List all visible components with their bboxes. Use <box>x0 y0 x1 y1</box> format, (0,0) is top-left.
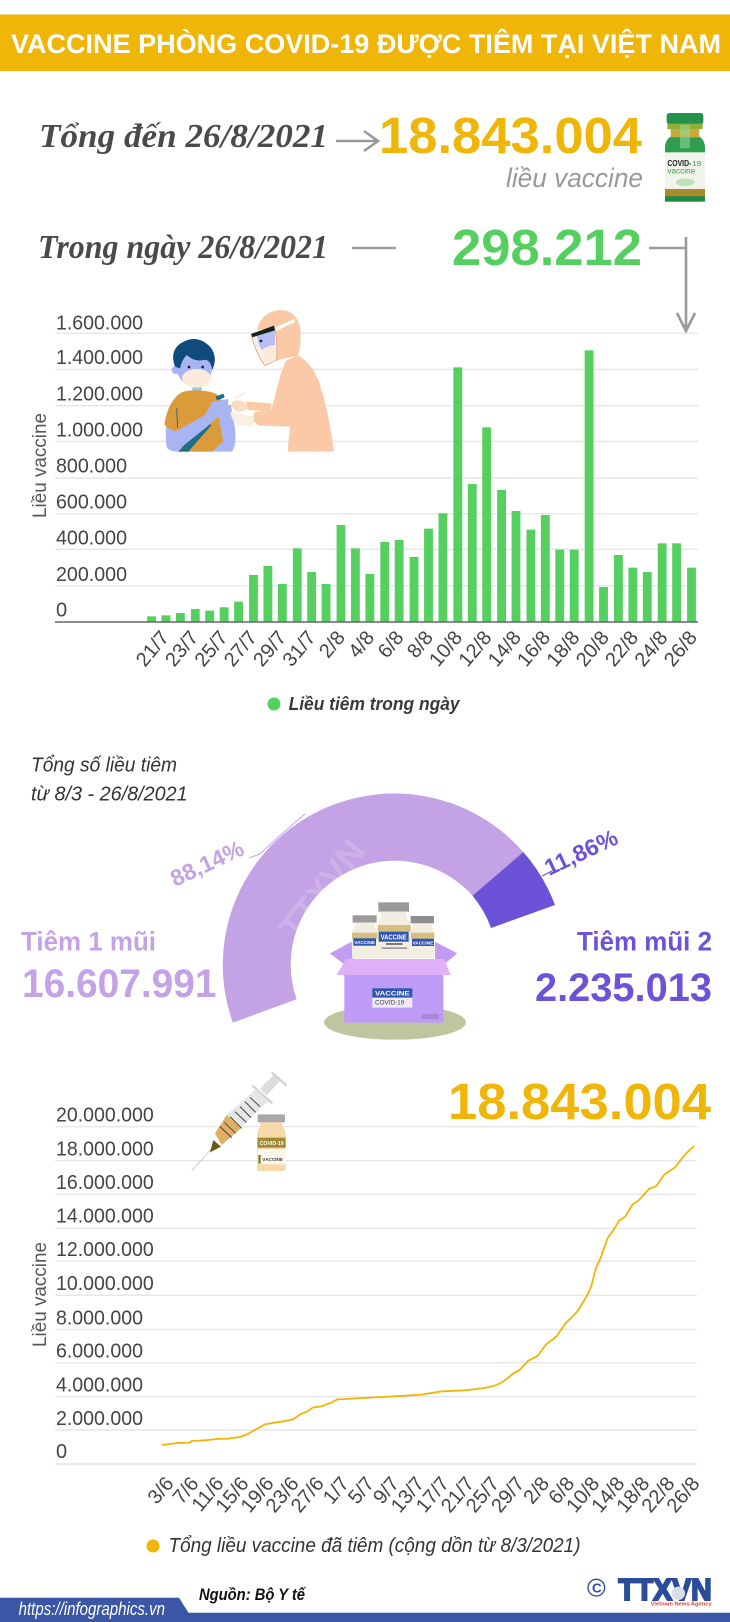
chart gridlines <box>55 333 698 586</box>
stat: second dose: Tiêm mũi 2 <box>577 927 712 957</box>
left vial: VACCINE <box>354 940 376 946</box>
total doses headline: liều vaccine <box>506 163 643 193</box>
x axis date labels: 4/8 <box>344 627 379 663</box>
x axis date labels: 31/7 <box>279 627 321 671</box>
x axis date labels: 19/6 <box>237 1473 279 1517</box>
x axis date labels: 11/6 <box>188 1473 229 1516</box>
y axis title: Liều vaccine <box>30 413 51 518</box>
footer bar with site address <box>0 1598 730 1622</box>
chart gridlines <box>55 1127 697 1464</box>
icon: health worker vaccinating a patient <box>164 310 334 452</box>
total doses headline: Tổng đến 26/8/2021 <box>39 118 328 155</box>
legend: cumulative doses: Tổng liều vaccine đã tiêm (cộng dồn từ 8/3/2021) <box>168 1535 580 1557</box>
x axis date labels: 25/7 <box>191 627 233 671</box>
x axis date labels: 2/8 <box>519 1473 554 1509</box>
patient <box>164 339 235 452</box>
stat: first dose <box>21 927 216 1006</box>
watermark: TTXVN <box>272 833 373 947</box>
box label <box>372 988 412 1008</box>
logo: TTXVN: TTXVN <box>618 1574 712 1607</box>
y axis labels: 12.000.000 <box>56 1239 154 1261</box>
x axis date labels: 7/6 <box>169 1473 203 1509</box>
x axis date labels: 8/8 <box>403 627 438 663</box>
daily doses headline with connector arrow: 298.212 <box>452 219 642 276</box>
total doses headline <box>39 107 643 193</box>
x axis date labels: 15/6 <box>212 1473 254 1517</box>
vial <box>257 1114 286 1171</box>
icon: green covid vaccine vial: vaccine <box>667 167 696 176</box>
y axis labels: 800.000 <box>56 456 127 478</box>
vial: COVID-19 <box>260 1141 284 1147</box>
y axis labels: 200.000 <box>56 564 127 586</box>
right vial: VACCINE <box>413 940 434 946</box>
x axis date labels: 5/7 <box>344 1473 379 1509</box>
title banner <box>0 14 730 71</box>
stat: first dose: 16.607.991 <box>22 962 216 1006</box>
x axis date labels: 18/8 <box>612 1473 654 1517</box>
x axis date labels: 13/7 <box>387 1473 429 1517</box>
x axis date labels <box>132 627 702 671</box>
x axis date labels <box>144 1473 704 1517</box>
x axis date labels: 23/6 <box>262 1473 304 1517</box>
y axis labels: 0 <box>56 1441 67 1463</box>
x axis date labels: 6/8 <box>544 1473 579 1509</box>
legend: daily doses: Liều tiêm trong ngày <box>289 694 461 714</box>
left vial <box>352 915 377 958</box>
y axis labels: 20.000.000 <box>56 1105 154 1127</box>
x axis date labels: 27/7 <box>220 627 262 671</box>
y axis labels: 10.000.000 <box>56 1273 154 1295</box>
x axis date labels: 23/7 <box>161 627 203 671</box>
box label: VACCINE <box>375 990 410 997</box>
y axis labels: 16.000.000 <box>56 1172 154 1194</box>
syringe <box>192 1072 287 1171</box>
icon: syringe and vial <box>192 1072 287 1171</box>
x axis date labels: 24/8 <box>631 627 673 671</box>
y axis labels <box>56 312 143 622</box>
right vial <box>411 916 434 958</box>
segment: second dose 11,86% <box>472 852 555 928</box>
x axis date labels: 29/7 <box>249 627 291 671</box>
stat: first dose: Tiêm 1 mũi <box>21 927 156 957</box>
x axis date labels: 10/8 <box>425 627 467 671</box>
center vial <box>378 902 411 958</box>
y axis labels: 2.000.000 <box>56 1408 143 1430</box>
y axis labels: 600.000 <box>56 492 127 514</box>
x axis date labels: 9/7 <box>369 1473 404 1509</box>
segment: first dose 88,14% <box>223 794 523 1023</box>
y axis labels <box>56 1105 154 1463</box>
stat: second dose <box>535 927 712 1010</box>
line chart: cumulative doses <box>30 1105 704 1517</box>
section note: total doses period <box>31 755 188 806</box>
x axis date labels: 20/8 <box>572 627 614 671</box>
y axis labels: 1.200.000 <box>56 384 143 406</box>
icon: green covid vaccine vial: COVID- <box>667 158 692 168</box>
y axis labels: 1.000.000 <box>56 420 143 442</box>
percent label 88,14%: 88,14% <box>166 835 248 892</box>
title banner: VACCINE PHÒNG COVID-19 ĐƯỢC TIÊM TẠI VIỆT NAM <box>11 28 721 59</box>
x axis date labels: 18/8 <box>543 627 585 671</box>
x axis date labels: 2/8 <box>315 627 350 663</box>
y axis labels: 1.400.000 <box>56 347 143 369</box>
section note: total doses period: từ 8/3 - 26/8/2021 <box>31 784 188 806</box>
icon: green covid vaccine vial <box>665 113 705 202</box>
box label: COVID-19 <box>375 1001 405 1007</box>
bar chart: daily doses <box>30 312 702 671</box>
x axis date labels: 22/8 <box>601 627 643 671</box>
health worker <box>230 310 334 452</box>
center vial: VACCINE <box>381 934 407 941</box>
x axis date labels: 17/7 <box>412 1473 454 1517</box>
y axis title: Liều vaccine <box>30 1242 51 1347</box>
x axis date labels: 14/8 <box>484 627 526 671</box>
semi-donut chart: first and second doses <box>166 794 622 1023</box>
x axis date labels: 26/8 <box>663 1473 704 1517</box>
cumulative line <box>162 1146 694 1445</box>
x axis date labels: 22/8 <box>638 1473 679 1517</box>
x axis date labels: 6/8 <box>374 627 409 663</box>
icon: box of vaccine vials <box>324 902 466 1040</box>
x axis date labels: 27/6 <box>287 1473 329 1517</box>
x axis date labels: 29/7 <box>487 1473 529 1517</box>
total headline above line chart: 18.843.004 <box>448 1073 712 1130</box>
bars <box>147 350 696 622</box>
x axis date labels: 12/8 <box>455 627 497 671</box>
icon: green covid vaccine vial: 19 <box>692 159 701 168</box>
y axis labels: 400.000 <box>56 527 127 549</box>
daily doses headline with connector arrow <box>38 219 695 331</box>
y axis labels: 14.000.000 <box>56 1206 154 1228</box>
y axis labels: 4.000.000 <box>56 1374 143 1396</box>
y axis labels: 1.600.000 <box>56 312 143 334</box>
x axis date labels: 21/7 <box>132 627 174 671</box>
x axis date labels: 14/8 <box>587 1473 629 1517</box>
daily doses headline with connector arrow: Trong ngày 26/8/2021 <box>38 229 328 266</box>
total doses headline: 18.843.004 <box>379 107 643 164</box>
footer bar with site address: https://infographics.vn <box>19 1599 165 1619</box>
x axis date labels: 1/7 <box>319 1473 354 1509</box>
percent label 11,86%: 11,86% <box>540 824 622 881</box>
percent label 88,14% <box>166 814 305 892</box>
vial: VACCINE <box>262 1157 283 1162</box>
logo: TTXVN: C <box>592 1581 602 1596</box>
y axis labels: 0 <box>56 600 67 622</box>
y axis labels: 6.000.000 <box>56 1340 143 1362</box>
x axis date labels: 3/6 <box>144 1473 178 1509</box>
source note: Nguồn: Bộ Y tế <box>199 1585 306 1604</box>
stat: second dose: 2.235.013 <box>535 966 712 1010</box>
x axis date labels: 25/7 <box>462 1473 504 1517</box>
section note: total doses period: Tổng số liều tiêm <box>31 755 177 777</box>
y axis labels: 8.000.000 <box>56 1307 143 1329</box>
y axis labels: 18.000.000 <box>56 1139 154 1161</box>
x axis date labels: 16/8 <box>513 627 555 671</box>
x axis date labels: 10/8 <box>562 1473 604 1517</box>
logo: TTXVN: Vietnam News Agency <box>651 1602 713 1608</box>
x axis date labels: 26/8 <box>660 627 702 671</box>
x axis date labels: 21/7 <box>437 1473 479 1517</box>
